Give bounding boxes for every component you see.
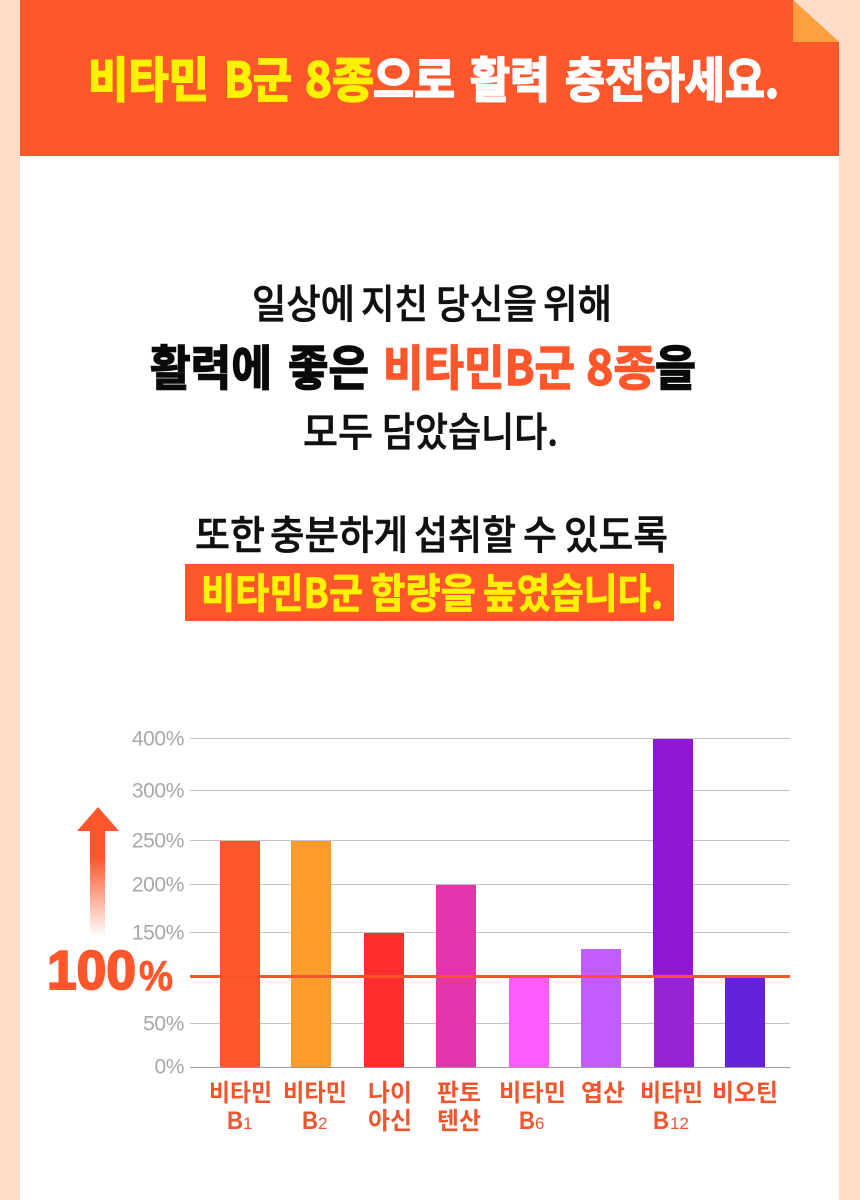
bar chart	[47, 728, 790, 1136]
y axis labels: 50%	[143, 1012, 184, 1036]
label: niacin	[368, 1073, 412, 1136]
text line 2: 활력에	[150, 329, 272, 399]
label: B12: 12	[670, 1114, 689, 1133]
y axis labels: 0%	[154, 1056, 184, 1078]
label: B1: B	[227, 1107, 243, 1135]
y axis labels: 250%	[132, 830, 184, 852]
text line 3: 담았습니다.	[382, 400, 558, 458]
label: B1: 비타민	[209, 1073, 272, 1108]
label: B1	[209, 1073, 272, 1135]
bar: B6	[509, 977, 549, 1067]
label: niacin: 아신	[368, 1101, 412, 1136]
text line 2: 비타민B군	[383, 329, 575, 399]
label: folic: 엽산	[581, 1073, 625, 1108]
bar: B1	[220, 841, 260, 1067]
text line 4: 또한	[195, 503, 265, 561]
text line 4: 있도록	[564, 503, 668, 561]
label: B6: 6	[535, 1114, 544, 1133]
y axis labels: 400%	[132, 728, 184, 750]
text line 2	[150, 329, 696, 399]
text block: higher content	[185, 503, 674, 621]
heading: B군	[224, 41, 292, 111]
text line 2: 을	[655, 329, 696, 399]
text line 1	[252, 272, 612, 330]
label: pantothenic	[437, 1073, 481, 1136]
label: B2: 2	[318, 1114, 327, 1133]
reference line: 100%	[190, 975, 790, 978]
bar: folic	[581, 949, 621, 1067]
text block: intro	[150, 272, 696, 458]
bar: B12	[653, 739, 694, 1067]
text line 4: 수	[523, 503, 557, 561]
text line 4: 충분하게	[270, 503, 408, 561]
text line 3	[303, 400, 558, 458]
y axis labels	[132, 728, 184, 1078]
text line 1: 지친	[361, 272, 428, 330]
panel: header banner	[20, 0, 839, 156]
bar: B2	[291, 841, 331, 1067]
grid lines	[190, 738, 790, 1068]
label: B12	[640, 1073, 703, 1135]
callout text: 높였습니다.	[483, 560, 663, 620]
icon: folded corner	[793, 0, 839, 42]
label: B2	[283, 1073, 347, 1135]
label: B6	[499, 1073, 566, 1135]
label: 100%: %	[139, 952, 173, 999]
text line 2: 8종	[586, 329, 656, 399]
label: B6: B	[519, 1107, 535, 1135]
y axis labels: 200%	[132, 874, 184, 896]
text line 3: 모두	[303, 400, 373, 458]
bar: niacin	[364, 933, 404, 1067]
bar: pantothenic	[436, 885, 476, 1067]
y axis labels: 150%	[132, 922, 184, 944]
heading: 충전하세요.	[565, 41, 779, 111]
heading: 활력	[470, 41, 550, 111]
text line 1: 위해	[543, 272, 612, 330]
heading: 비타민	[88, 41, 209, 111]
label: B2: 비타민	[283, 1073, 347, 1108]
label: pantothenic: 텐산	[437, 1101, 481, 1136]
icon: up arrow	[77, 807, 119, 937]
label: B1: 1	[243, 1114, 252, 1133]
heading	[88, 41, 779, 111]
callout text	[201, 560, 663, 620]
label: B12: 비타민	[640, 1073, 703, 1108]
heading: 으로	[373, 41, 455, 111]
text line 1: 당신을	[436, 272, 537, 330]
callout text: 비타민B군	[201, 560, 363, 620]
callout: highlight box	[185, 564, 674, 621]
text line 2: 좋은	[288, 329, 369, 399]
heading: 8종	[305, 41, 374, 111]
label: biotin: 비오틴	[712, 1073, 778, 1108]
label: niacin: 나이	[368, 1073, 412, 1108]
callout text: 함량을	[370, 560, 476, 620]
label: B2: B	[302, 1107, 318, 1135]
x axis labels	[209, 1073, 778, 1136]
text line 1: 일상에	[252, 272, 355, 330]
label: 100%: 100	[47, 939, 136, 1001]
y axis labels: 300%	[132, 780, 184, 802]
text line 4: 섭취할	[414, 503, 516, 561]
label: B12: B	[653, 1107, 669, 1135]
label: B6: 비타민	[499, 1073, 566, 1108]
bar: biotin	[725, 977, 765, 1067]
label: pantothenic: 판토	[437, 1073, 481, 1108]
text line 4	[195, 503, 668, 561]
